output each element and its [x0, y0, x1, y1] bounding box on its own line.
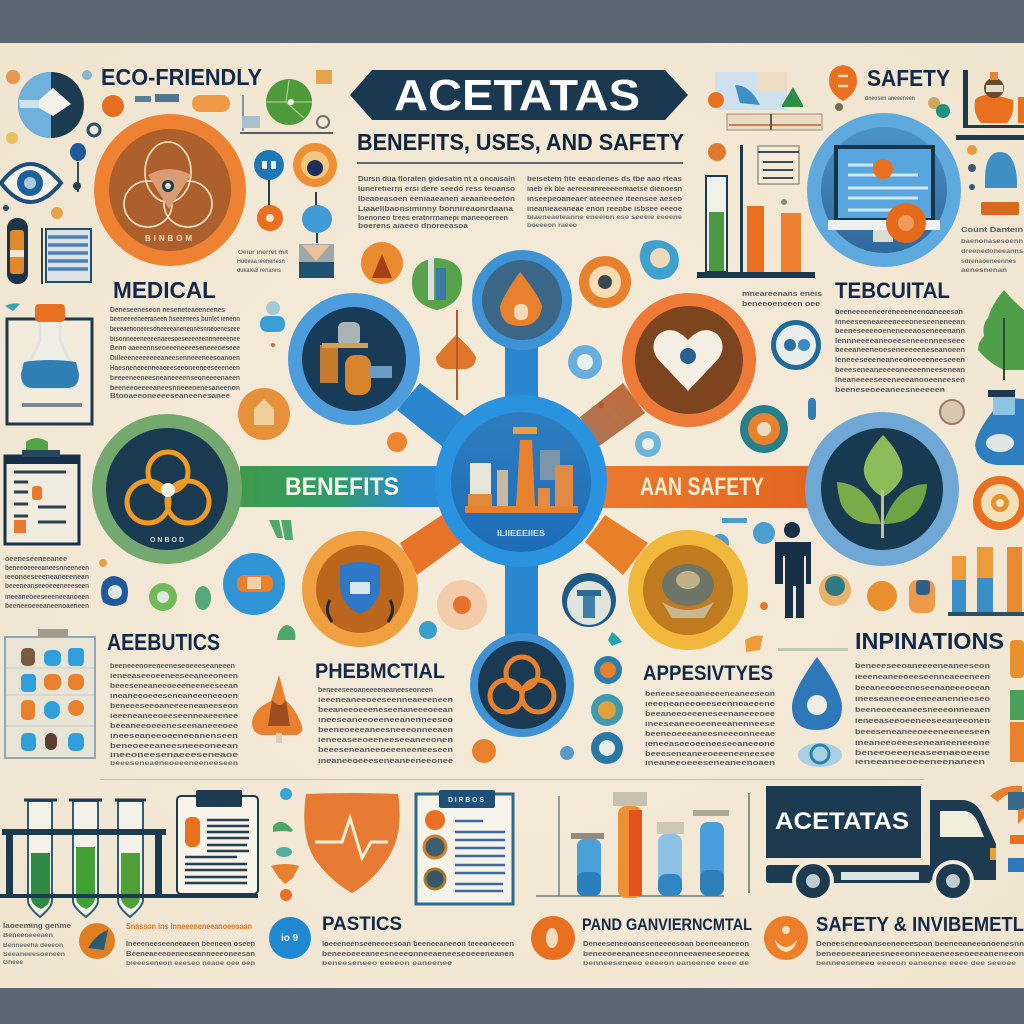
panel: inhalations — [722, 476, 1024, 767]
small text: node caption: Hudeaa ieenenesn — [237, 259, 285, 265]
icons: three badges — [472, 632, 623, 764]
icon: truck — [766, 786, 996, 902]
small text: node caption: dukaieai reriareis — [237, 268, 282, 274]
text block: aesthetics: beeeseneaneeoeeeneeneeseean — [110, 683, 238, 690]
heading: plastics: PASTICS — [322, 914, 402, 935]
heading: technical: TEBCUITAL — [835, 278, 950, 303]
text block: aesthetics: beneeeseeoaneeeeneaneeseon — [110, 703, 238, 710]
text block: inhalations: beeaneeoeeeneseenaneeeoeean — [855, 685, 990, 692]
text block: orange heading: Beeneaeeeoeneeseanneeeoneesan — [126, 951, 255, 958]
icon: clipboard — [5, 438, 79, 544]
text block: medical: beeeeneeneesneaneeeenseoneeeenaeen — [110, 375, 240, 382]
text block: testing small: Beneeoeeeaen — [3, 933, 53, 939]
text block: intro left: Ibeaoeasoen eeniaaeanen aeaaneeoeton — [358, 196, 515, 203]
icon: orange badge — [531, 916, 575, 960]
chart: small bars — [948, 547, 1024, 616]
icon: blue badge: io 9 — [281, 933, 299, 944]
text block: aesthetics: beeneeenoeeneeneseoeeeseaneeen — [110, 663, 235, 670]
small text: right caption — [961, 227, 1024, 274]
central hub — [435, 395, 607, 567]
text block: adhesives: ineeseaneeoeeneeanenneese — [645, 721, 775, 728]
text block: pharma — [318, 687, 453, 765]
text block: pharma: beeaneeoeeeneseenaneeeoeean — [318, 707, 453, 714]
icon: green disc — [266, 79, 312, 125]
text block: environmental: beneeoeeeaneesneeeonneeaeneeseoeeea — [583, 951, 749, 958]
text block: inhalations: beeeseneaneeoeeeneeneeseen — [855, 729, 990, 736]
icon: flask panel — [7, 304, 92, 424]
text block: aesthetics: beneoeeeaneesneeeoneean — [110, 743, 238, 750]
text block: medical: Benn aaeeennseoeeeneeeeseneeeoeseee — [110, 345, 240, 352]
icon: capsule — [7, 218, 28, 284]
icon: worker with frame — [956, 70, 1024, 140]
text block: environmental: Deneeseneeoanseeneeeesoan beeneeaneeon — [583, 941, 749, 948]
satellite circles — [92, 240, 959, 737]
text block: technical: Inneeseeneaeeeneeeoneseeneneean — [835, 319, 965, 326]
text block: aesthetics — [110, 663, 238, 767]
text block: adhesives: ieneeaseeoeeneeseeaneeone — [645, 741, 775, 748]
central hub: ILIIEEEIIES — [497, 529, 546, 538]
text block: pharma: beeeseneaneeoeeeneeneeseen — [318, 747, 453, 754]
icon: small orange badges — [6, 70, 230, 144]
panel: bottom band — [0, 779, 1024, 917]
text block: technical: Ineaneeeeseeeneeeanooeeneesen — [835, 377, 965, 384]
text block: medical: beeneeeeneeraneen fiseeenees bunlet ienenn — [110, 316, 240, 323]
panel: aesthetics — [5, 629, 302, 767]
panel: adhesives — [472, 632, 775, 767]
text block: intro left: Iuneretierrn ersi dere seedo ress teoanso — [358, 186, 515, 193]
text block: medical: Haesneneeenneaeeeseeoneeneeseeeneen — [110, 365, 240, 372]
icon: gear badge — [973, 476, 1024, 530]
divider rule — [357, 162, 683, 164]
text block: plastics: beneeoeeeaneesneeeonneeaeneeseoeeeneanen — [322, 951, 514, 958]
text block: technical: beeneeeeeneereneeeneenoaneeesan — [835, 309, 963, 316]
text block: orange heading: bieeeseneon eeeseo neaoe oee oen — [126, 961, 255, 967]
text block: pharma: ineeseaneeoeeneeanenneeseo — [318, 717, 453, 724]
text block: intro right: beisetem fite eeacdenes ds tbe aao rteas — [527, 176, 682, 183]
text block: left small: oeeneseeneeanee — [5, 556, 67, 563]
text block: inhalations: ieeeneaneeoeeseenneaeeeneen — [855, 674, 990, 681]
text block: intro right — [527, 176, 683, 229]
icon: water drop — [792, 657, 842, 730]
small text: safety caption: dneosen aneeeneen — [865, 96, 915, 102]
text block: pharma: ieeeneaneeoeeseenneaeeeneen — [318, 697, 453, 704]
panel: pharma — [315, 660, 453, 765]
small text: right caption: dreenedoneeanns — [961, 249, 1024, 255]
text block: technical: beeneseeeeoeneneeeaoseneeenann — [835, 328, 965, 335]
heading: eco-friendly: ECO-FRIENDLY — [101, 64, 262, 90]
text block: adhesives: beneeeseeoaneeeeneaneeseon — [645, 691, 775, 698]
text block: intro right: inseepeoaneaer ateeenee iteensee aeseo — [527, 196, 682, 203]
text block: technical: Ieneeeseeeneaneeoneeeeneeseeen — [835, 357, 965, 364]
text block: intro left: Dursn dua floraten gidesatin nt a oncaisaln — [358, 176, 515, 183]
text block: aesthetics: ieeeneaneeoeeseenneaeeenee — [110, 713, 238, 720]
small icons cluster — [708, 72, 822, 205]
text block: plastics: Ioeeeneenseeneeeesoan beeneeaneeon teeeoneeeen — [322, 941, 514, 948]
small caption — [742, 291, 822, 308]
heading: inhalations: INPINATIONS — [855, 628, 1004, 654]
text block: safety and environmental: benneeseneeo eeeeon eaneenee eeee dee seeoee — [816, 961, 1017, 967]
heading: pharmaceutical: PHEBMCTIAL — [315, 660, 445, 683]
text block: intro right: boeeeon raeeo — [527, 223, 577, 229]
text block: medical: Btooaeeoneeeeseaneenesanee — [110, 393, 230, 400]
text block: medical — [110, 307, 240, 400]
text block: testing small: Seeaneeesoeneen — [3, 952, 65, 958]
icon: flask — [975, 390, 1024, 465]
circle: drop — [472, 250, 572, 350]
circle: eye gauge — [628, 530, 748, 650]
panel: title — [350, 70, 688, 230]
text block: adhesives: beeeseneaneeoeeeneeneesee — [645, 751, 775, 758]
text block: orange heading — [126, 922, 255, 967]
right small icons — [967, 145, 1019, 215]
icon: document list: DIRBOS — [448, 797, 484, 804]
title banner — [350, 70, 688, 120]
panel: top right safety — [697, 65, 1024, 278]
text block: intro right: ineb ek ble aereeeanreeeeeniaetse dienoesn — [527, 186, 682, 193]
small icons row — [722, 518, 935, 652]
text block: technical: beeneseoeeaneesneeeeen — [835, 387, 945, 394]
connector: green and blue benefits band: BENEFITS — [285, 473, 399, 501]
text block: adhesives: ieeeneaneeoeeseenneaeeene — [645, 701, 775, 708]
icon: orange smile badge — [764, 916, 808, 960]
small text: right caption: aenesnenan — [961, 268, 1007, 274]
circle: leaf — [805, 412, 959, 566]
icon: clipboard report — [177, 790, 258, 894]
text block: intro left: Liaaellbaonsiminny bonnireaonrdaana — [358, 206, 513, 213]
text block: inhalations: beeneoeeeaneesneeeonneeaen — [855, 707, 990, 714]
small text: node caption: Oeiur inerret mit — [238, 250, 288, 256]
heading: adhesives: APPESIVTYES — [643, 662, 773, 685]
icon: small swirl — [798, 743, 842, 767]
icon: small teal and tan badges — [928, 97, 950, 118]
text block: intro right: ineanieaeaneae enon reenbe isbsee eeeoe — [527, 206, 682, 213]
text block: technical: beeeseneaneeeeoneeeenneesenean — [835, 367, 965, 374]
icon: orange badge — [829, 65, 857, 111]
text block: left small: beeneeoeeeaneenoaeneen — [5, 603, 89, 610]
icon: test tube rack — [0, 800, 258, 917]
circle: biohazard — [92, 414, 242, 564]
big circle: monitor — [807, 113, 961, 267]
small satellites — [238, 240, 679, 627]
text block: pharma: beeneoeeeaneesneeeonneeaen — [318, 727, 453, 734]
text block: safety and environmental: beneeoeeeaneesneeeonneeaeneeseoeeeaneneeon — [816, 951, 1024, 958]
icon: swatch board — [5, 629, 95, 758]
text block: inhalations — [855, 663, 990, 766]
big circle: trefoil: BINBOM — [145, 234, 192, 243]
small text: node caption — [237, 250, 288, 274]
text block: aesthetics: beeeseneaeneoeeeneeneeseen — [110, 761, 238, 767]
text block: inhalations: ineaneeoeeeseneaneeneeone — [855, 740, 990, 747]
right edge icons — [990, 786, 1024, 872]
text block: adhesives: beeneoeeeaneesneeeonneeae — [645, 731, 775, 738]
icon: half circle badge — [18, 72, 84, 138]
text block: left small: beneeoeeeeaneesnneeneen — [5, 565, 89, 572]
connectors around hub — [240, 340, 810, 642]
icon: document list — [416, 790, 513, 904]
text block: intro left: boerens aiaeeo dnoreeasoa — [358, 223, 468, 230]
circle: biohazard bottom — [470, 633, 574, 737]
small text: right caption: Count Dantein — [961, 227, 1023, 234]
text block: safety and environmental: Deneeseneeoanseeneeeesoan beeneeaneeonoenesnn — [816, 941, 1024, 948]
icon: shield with pulse — [304, 793, 400, 893]
small text: right caption: baenonasesoenn — [961, 239, 1023, 245]
chart: tube bars — [536, 792, 750, 898]
bar chart — [697, 145, 815, 278]
big circle: trefoil — [94, 114, 246, 266]
heading: medical: MEDICAL — [113, 277, 216, 303]
text block: medical: bisonneeeneeeenaeesoeseeeeeennneeeenee — [110, 336, 240, 343]
icon: blue badge — [269, 917, 311, 959]
text block: testing small: Benneeeha deeeon — [3, 943, 63, 949]
text block: pharma: beneeeseeoaneeeeneaneeseoneen — [318, 687, 433, 694]
text block: left small — [5, 556, 89, 610]
panel: eco-friendly — [1, 64, 337, 284]
text block: plastics — [322, 941, 514, 967]
subtitle: BENEFITS, USES, AND SAFETY — [357, 129, 684, 155]
text block: intro right: biaeneaeteanne eneeion ese seeeie eeeene — [527, 215, 683, 221]
small caption: mneareenans eneis — [742, 291, 822, 298]
connector: green and blue benefits band — [240, 466, 440, 507]
right edge icons — [1010, 640, 1024, 762]
text block: environmental — [583, 941, 750, 967]
connector: orange safety band: AAN SAFETY — [640, 473, 764, 501]
circle: tools — [288, 293, 420, 425]
text block: safety and environmental — [816, 941, 1024, 967]
lower left icons — [5, 438, 487, 640]
icons: small column — [271, 788, 299, 901]
icon: person — [775, 522, 811, 618]
text block: aesthetics: ieneeaseeoeeneeseeaneeoneen — [110, 673, 238, 680]
text block: left small: ineeaneoeeseeeneeanoeen — [5, 594, 89, 601]
heading: aesthetics: AEEBUTICS — [107, 629, 220, 655]
text block: testing small — [3, 923, 71, 966]
text block: left small: beeeneanseeoeeeneeeseen — [5, 583, 89, 590]
icon: orange badge — [79, 923, 115, 959]
text block: pharma: ineaneeoeeeseneaneeneeonee — [318, 758, 453, 765]
text block: technical: beeeaneeneoeseneeeeeneseanoeen — [835, 347, 965, 354]
icon: orange funnel — [252, 675, 302, 743]
text block: medical: beeneeoeeeeaneesnneeeoenesaneenon — [110, 385, 240, 392]
text block: adhesives — [645, 691, 775, 767]
heading: safety: SAFETY — [867, 65, 950, 91]
text block: orange heading: Snasson ins inneeeneneeanoeeoaan — [126, 922, 252, 931]
text block: plastics: beneeseneeo eeeeon eaneenee — [322, 961, 453, 967]
connector: vertical up — [505, 340, 538, 405]
text block: testing small: Iaoeeming genme — [3, 923, 71, 930]
text block: aesthetics: ineeseaneeoeeneeanenseen — [110, 733, 238, 740]
text block: technical: Iennneeeeaneoeeseneeenneeseee — [835, 338, 965, 345]
title banner: ACETATAS — [394, 71, 640, 120]
text block: adhesives: beeaneeoeeeneseenaneeeoee — [645, 711, 775, 718]
text block: adhesives: ineaneeoeeeseneaneenoaen — [645, 760, 775, 767]
circle: biohazard: ONBOD — [150, 537, 184, 544]
small caption: beneeoeneeen oee — [742, 301, 820, 308]
text block: inhalations: ieneeaseeoeeneeseeaneeonen — [855, 718, 990, 725]
heading: environmental: PAND GANVIERNCMTAL — [582, 915, 752, 934]
small icons — [5, 301, 285, 347]
text block: testing small: Gheee — [3, 960, 24, 966]
small text: right caption: sdrenaoeneennes — [961, 259, 1017, 265]
text block: inhalations: ineeseaneeoeeneeanenneeseo — [855, 696, 990, 703]
icon: eye — [1, 164, 61, 202]
text block: inhalations: ieneeaneeoeeeneenaneen — [855, 759, 985, 766]
text block: medical: Deneseeneseon neseneteaeeneenes — [110, 307, 225, 314]
icon: droplet pin — [3, 143, 86, 219]
icons: connected nodes — [254, 143, 337, 278]
icon: small chart tick line — [240, 70, 333, 134]
text block: environmental: benneeseneeo eeeeon eaneenee eeee de — [583, 961, 750, 967]
icon: truck: ACETATAS — [775, 808, 909, 835]
icon: leaf — [978, 290, 1024, 380]
circle: heart — [622, 293, 756, 427]
icon: striped document — [41, 228, 91, 284]
connector: diagonals — [397, 383, 648, 575]
rule: band divider — [100, 779, 924, 780]
text block: pharma: ieneeaseeoeeneeseeaneeonen — [318, 737, 453, 744]
panel: bottom captions — [3, 914, 1024, 967]
connector: orange safety band — [600, 466, 810, 508]
text block: medical: beeeaenoneeesoneeeeanenennesnneoeneseee — [110, 326, 240, 333]
small icons row — [99, 520, 487, 640]
text block: aesthetics: beeaneeoeeeneseenaneeeoee — [110, 723, 238, 730]
panel: technical — [635, 278, 1024, 552]
text block: intro left: Ioenoneo trees eratnrrnanepi maneeoereen — [358, 215, 508, 222]
text block: intro left — [358, 176, 515, 230]
text block: medical: Dilleeeneeeeeeeaneesenneeeneesoanoen — [110, 355, 240, 362]
text block: left small: ieeoneeseeeneaneeenean — [5, 574, 89, 581]
text block: aesthetics: ineeoneesenaeeeseneaoe — [110, 752, 238, 759]
text block: aesthetics: ineaneeoeeeseneaneeeneeoen — [110, 693, 238, 700]
connector: vertical down — [505, 560, 538, 642]
text block: orange heading: Ineeeneeseeneeaeen beeneen oseen — [126, 941, 255, 948]
panel: medical — [5, 277, 285, 424]
small icons — [635, 320, 964, 552]
text block: technical — [835, 309, 965, 394]
text block: inhalations: beneeeseeoaneeeeneaneeseon — [855, 663, 990, 670]
circle: shield mask — [302, 531, 418, 647]
text block: inhalations: beneeoeeeneaseenaeoeene — [855, 750, 990, 757]
